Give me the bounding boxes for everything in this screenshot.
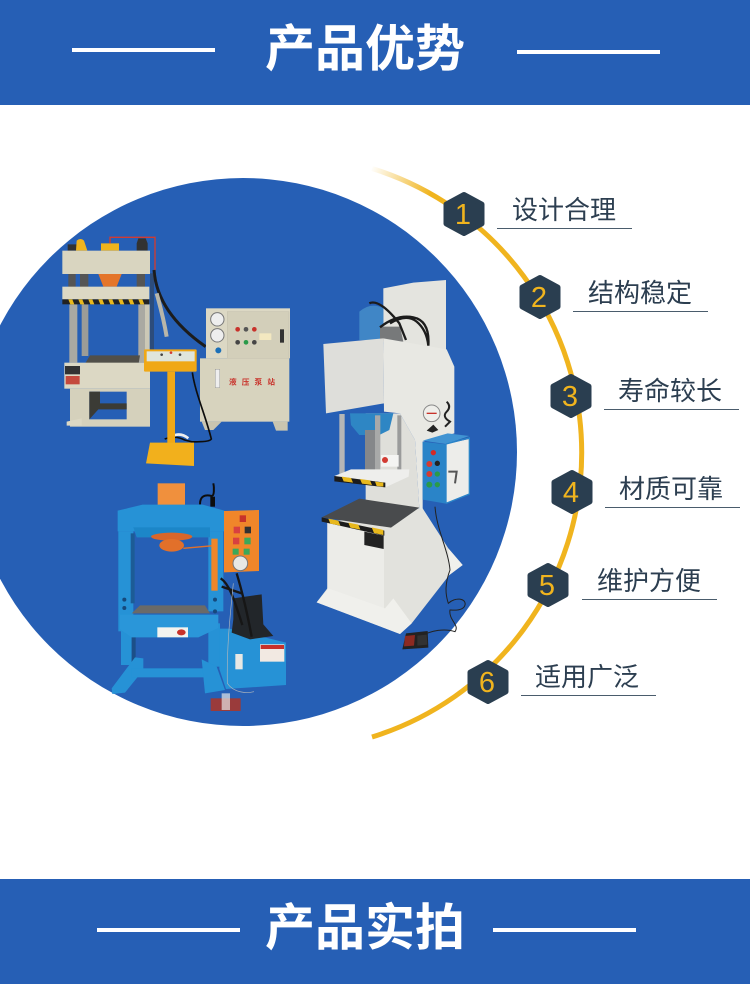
advantage 2: stable structure [522, 278, 708, 316]
machine: blue H-frame press [112, 483, 286, 711]
header band: product advantages [0, 0, 750, 105]
pump station label: 液压泵站 [229, 376, 275, 386]
heading: product photos: 产品实拍 [265, 900, 465, 956]
advantage 3: long service life: 寿命较长 [618, 376, 722, 406]
head front [323, 338, 384, 413]
body side casting [383, 338, 454, 510]
upper table [334, 469, 409, 487]
web of frame [366, 413, 419, 508]
advantage 5: easy maintenance: 维护方便 [597, 566, 701, 596]
lower table [322, 499, 419, 528]
blue circle backdrop [0, 178, 517, 726]
footer band: product photos [0, 879, 750, 984]
orange control panel [224, 510, 259, 572]
advantage 6: wide application: 适用广泛 [535, 662, 639, 692]
advantage 2: stable structure: 结构稳定 [588, 278, 692, 308]
advantage 5: easy maintenance: 5 [539, 570, 555, 602]
advantage 2: stable structure: 2 [531, 282, 547, 314]
advantage 6: wide application: 6 [479, 667, 495, 699]
main illustration area [0, 167, 740, 740]
advantage 6: wide application [470, 662, 656, 702]
pedal pouch [211, 698, 241, 711]
power unit [219, 629, 286, 689]
advantage 1: reasonable design [446, 194, 632, 234]
advantage 5: easy maintenance [530, 566, 717, 604]
electrical box [423, 433, 469, 444]
base casting [317, 508, 463, 634]
yellow arc [372, 168, 582, 737]
machine: C-frame press [317, 280, 469, 649]
cabinet front [327, 522, 384, 618]
foot pedal [402, 631, 428, 649]
advantage 4: reliable material: 材质可靠 [619, 474, 723, 504]
machine: four-column press with pump station [62, 237, 290, 466]
feet [317, 548, 463, 634]
heading: product advantages: 产品优势 [265, 21, 465, 77]
gauge [423, 405, 440, 422]
advantage 4: reliable material [554, 472, 740, 512]
advantage 1: reasonable design: 设计合理 [512, 195, 616, 225]
advantage 1: reasonable design: 1 [455, 199, 471, 231]
advantage 3: long service life: 3 [562, 381, 578, 413]
advantage 4: reliable material: 4 [563, 477, 579, 509]
ram and columns [350, 413, 393, 435]
advantage 3: long service life [553, 376, 739, 416]
